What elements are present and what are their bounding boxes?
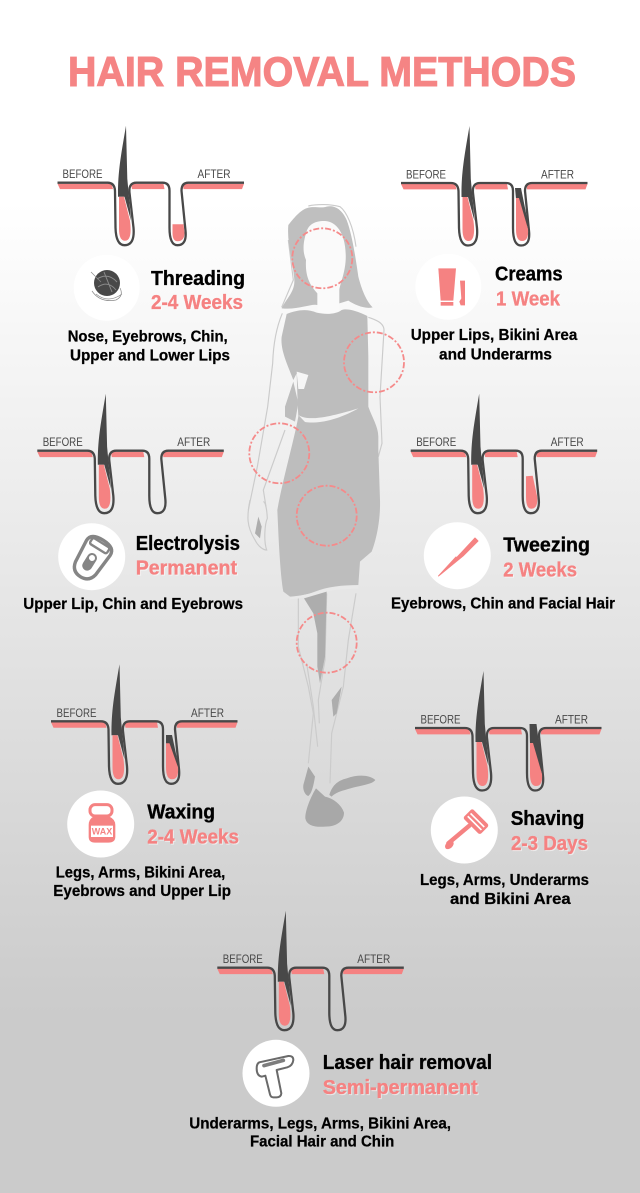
hair diagram: laser: AFTER bbox=[357, 954, 390, 966]
areas: waxing: Eyebrows and Upper Lip bbox=[53, 883, 231, 900]
heading: waxing: Waxing bbox=[147, 800, 215, 823]
icon: razor bbox=[431, 796, 498, 864]
hair diagram: tweezing bbox=[411, 394, 597, 513]
panel: creams bbox=[401, 126, 588, 363]
hair diagram: threading: BEFORE bbox=[62, 169, 103, 181]
areas: shaving: Legs, Arms, Underarms bbox=[420, 872, 589, 889]
icon: thread ball bbox=[74, 255, 140, 321]
areas: laser bbox=[189, 1115, 451, 1151]
areas: electrolysis: Upper Lip, Chin and Eyebrows bbox=[23, 596, 243, 613]
icon: wax jar bbox=[67, 790, 134, 858]
hair diagram: creams: BEFORE bbox=[406, 170, 446, 182]
hair diagram: tweezing: BEFORE bbox=[416, 437, 456, 449]
title: HAIR REMOVAL METHODS bbox=[68, 48, 576, 95]
panel: electrolysis bbox=[23, 394, 243, 613]
areas: shaving bbox=[420, 872, 589, 908]
duration: electrolysis: Permanent bbox=[136, 556, 237, 579]
inner leg bbox=[304, 592, 327, 683]
heading: laser: Laser hair removal bbox=[323, 1051, 492, 1074]
areas: creams: Upper Lips, Bikini Area bbox=[411, 327, 578, 344]
areas: threading: Upper and Lower Lips bbox=[70, 348, 230, 365]
face and neck bbox=[304, 221, 346, 314]
duration: tweezing: 2 Weeks bbox=[503, 559, 577, 582]
waist gap bbox=[297, 372, 308, 389]
hair diagram: waxing bbox=[51, 664, 238, 784]
circle: bikini area bbox=[297, 486, 357, 546]
duration: shaving: 2-3 Days bbox=[511, 832, 588, 855]
areas: shaving: and Bikini Area bbox=[450, 891, 571, 908]
panel: laser hair removal bbox=[189, 911, 492, 1151]
hair diagram: creams: AFTER bbox=[541, 170, 574, 182]
hair diagram: waxing: BEFORE bbox=[56, 708, 97, 720]
hair diagram: laser bbox=[217, 911, 404, 1030]
areas: laser: Facial Hair and Chin bbox=[250, 1134, 394, 1151]
foot bbox=[305, 788, 344, 827]
hair diagram: threading bbox=[58, 126, 244, 245]
icon: epilator bbox=[58, 523, 125, 590]
areas: waxing bbox=[53, 865, 231, 900]
belt highlight bbox=[298, 408, 358, 423]
hair diagram: tweezing: AFTER bbox=[551, 437, 584, 449]
hair diagram: waxing: AFTER bbox=[191, 708, 224, 720]
panel: shaving bbox=[415, 671, 602, 908]
areas: tweezing: Eyebrows, Chin and Facial Hair bbox=[391, 595, 615, 612]
hair diagram: threading: AFTER bbox=[198, 169, 230, 181]
hair diagram: creams bbox=[401, 126, 588, 246]
areas: threading bbox=[68, 329, 230, 365]
circle: face bbox=[292, 228, 352, 288]
areas: laser: Underarms, Legs, Arms, Bikini Area, bbox=[189, 1115, 451, 1132]
circle: legs bbox=[297, 613, 357, 673]
calf shade bbox=[332, 687, 342, 717]
heading: tweezing: Tweezing bbox=[503, 534, 590, 557]
left arm shade bbox=[285, 382, 298, 422]
icon: cream tube bbox=[415, 254, 481, 320]
hand shade bbox=[255, 517, 262, 538]
panel: threading bbox=[58, 126, 245, 365]
duration: laser: Semi-permanent bbox=[323, 1076, 478, 1099]
duration: creams: 1 Week bbox=[496, 287, 561, 310]
hair diagram: shaving: AFTER bbox=[555, 714, 588, 726]
heading: creams: Creams bbox=[495, 263, 563, 286]
hair bbox=[282, 206, 373, 309]
areas: waxing: Legs, Arms, Bikini Area, bbox=[56, 865, 225, 882]
duration: threading: 2-4 Weeks bbox=[151, 291, 243, 314]
areas: creams: and Underarms bbox=[439, 346, 552, 363]
icon: tweezers bbox=[424, 522, 491, 589]
areas: creams bbox=[411, 327, 578, 363]
areas: threading: Nose, Eyebrows, Chin, bbox=[68, 329, 228, 346]
heel bbox=[303, 767, 315, 796]
heading: threading: Threading bbox=[151, 267, 245, 290]
hair diagram: shaving bbox=[415, 671, 602, 790]
hair diagram: electrolysis: BEFORE bbox=[43, 437, 83, 449]
panel: waxing bbox=[51, 664, 239, 900]
hair diagram: electrolysis bbox=[37, 394, 224, 513]
outline strokes bbox=[248, 205, 384, 783]
icon: laser device bbox=[242, 1040, 310, 1107]
heading: shaving: Shaving bbox=[511, 807, 584, 830]
hair diagram: shaving: BEFORE bbox=[420, 714, 461, 726]
circle: underarm bbox=[344, 332, 404, 392]
dress bbox=[277, 309, 380, 597]
hem highlight bbox=[290, 586, 358, 599]
hair diagram: laser: BEFORE bbox=[223, 954, 263, 966]
figure: woman silhouette bbox=[248, 205, 384, 827]
hair diagram: electrolysis: AFTER bbox=[177, 437, 210, 449]
circle: arm bbox=[249, 423, 309, 483]
dashed target circles bbox=[249, 228, 404, 673]
heading: electrolysis: Electrolysis bbox=[136, 532, 240, 555]
duration: waxing: 2-4 Weeks bbox=[147, 825, 239, 848]
foot shadow bbox=[329, 776, 375, 797]
icon: wax jar: WAX bbox=[92, 827, 112, 837]
panel: tweezing bbox=[391, 394, 615, 612]
